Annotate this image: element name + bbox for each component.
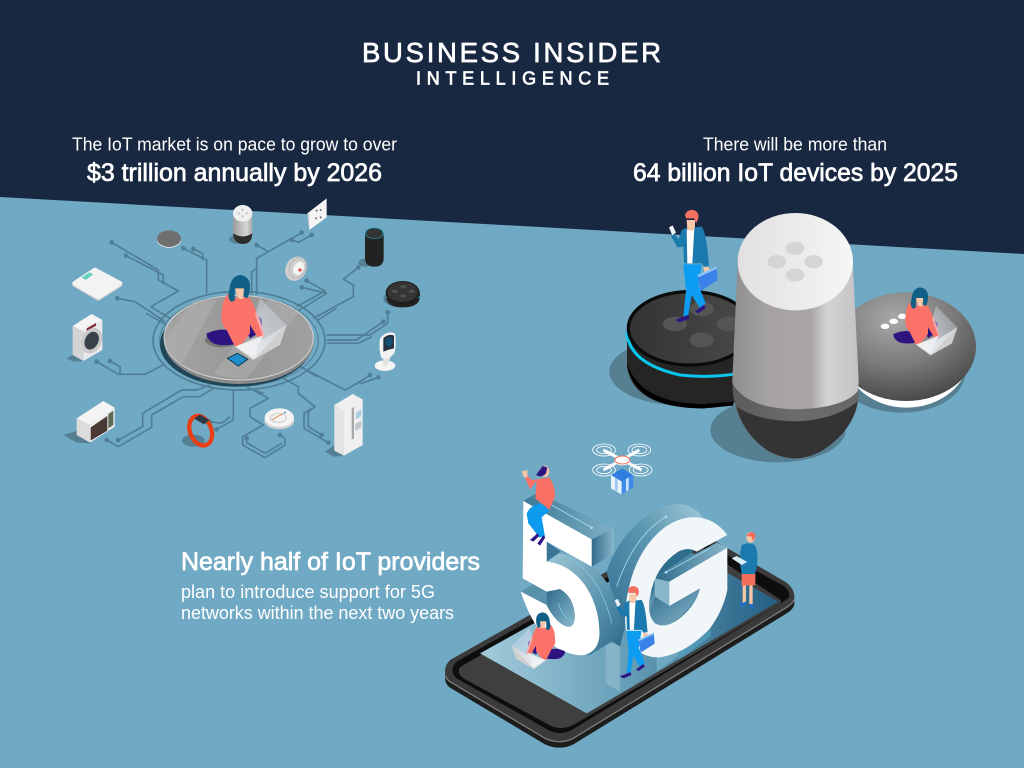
letter 5 <box>521 493 621 655</box>
person: woman with VR headset on 5 <box>522 466 555 546</box>
illustration: connected devices hub <box>63 198 420 458</box>
text block: 5G support <box>181 548 480 623</box>
text block: device count: 64 billion IoT devices by 2025 <box>633 159 958 187</box>
text block: device count <box>633 134 958 187</box>
dark header band <box>0 0 1024 254</box>
circuit traces <box>97 233 388 458</box>
logo: Business Insider Intelligence: BUSINESS INSIDER <box>362 37 661 68</box>
person: woman with laptop on screen <box>512 612 565 669</box>
logo: Business Insider Intelligence <box>362 37 661 88</box>
platform disc <box>160 295 314 387</box>
logo: Business Insider Intelligence: INTELLIGENCE <box>416 68 609 88</box>
person: man with briefcase on screen <box>615 586 655 678</box>
device: robot vacuum <box>264 408 294 429</box>
text block: 5G support: plan to introduce support for 5G <box>181 582 435 602</box>
person: standing with tablet <box>732 532 757 609</box>
illustration: smartphone with screen <box>445 527 794 748</box>
text block: device count: There will be more than <box>703 134 887 154</box>
person: woman with laptop <box>205 275 287 360</box>
device: fitness band <box>182 412 216 449</box>
device: google home small <box>229 205 252 244</box>
text block: 5G support: Nearly half of IoT providers <box>181 548 480 576</box>
home speaker shadow <box>710 398 846 462</box>
device: smart speaker mini <box>157 230 181 248</box>
letter G <box>607 504 727 657</box>
device: fridge <box>325 394 363 457</box>
platform rings <box>153 291 325 390</box>
trace end nodes <box>94 230 390 445</box>
device: echo dot <box>383 281 420 307</box>
echo dot speaker <box>627 292 757 408</box>
text block: market size <box>72 134 397 187</box>
device: microwave <box>63 401 115 443</box>
text block: 5G support: networks within the next two years <box>181 603 454 623</box>
illustration: smart speakers with people <box>609 210 976 462</box>
device: tall echo <box>358 228 384 267</box>
speaker shadow <box>609 338 747 405</box>
device: washing machine <box>67 314 106 362</box>
person: woman with laptop on mini <box>893 287 957 355</box>
device: wall socket <box>307 198 327 230</box>
drone with package <box>593 444 652 494</box>
device: bathroom scale <box>75 270 120 298</box>
tablet <box>227 353 248 366</box>
home mini speaker <box>836 292 976 413</box>
illustration: people and drone around 5G <box>512 444 757 678</box>
device: security camera <box>375 332 396 371</box>
person: man with briefcase <box>669 210 718 322</box>
google home speaker <box>732 213 859 458</box>
text block: market size: $3 trillion annually by 2026 <box>87 159 382 187</box>
device: smoke detector <box>281 253 311 285</box>
text block: market size: The IoT market is on pace to grow to over <box>72 134 397 154</box>
